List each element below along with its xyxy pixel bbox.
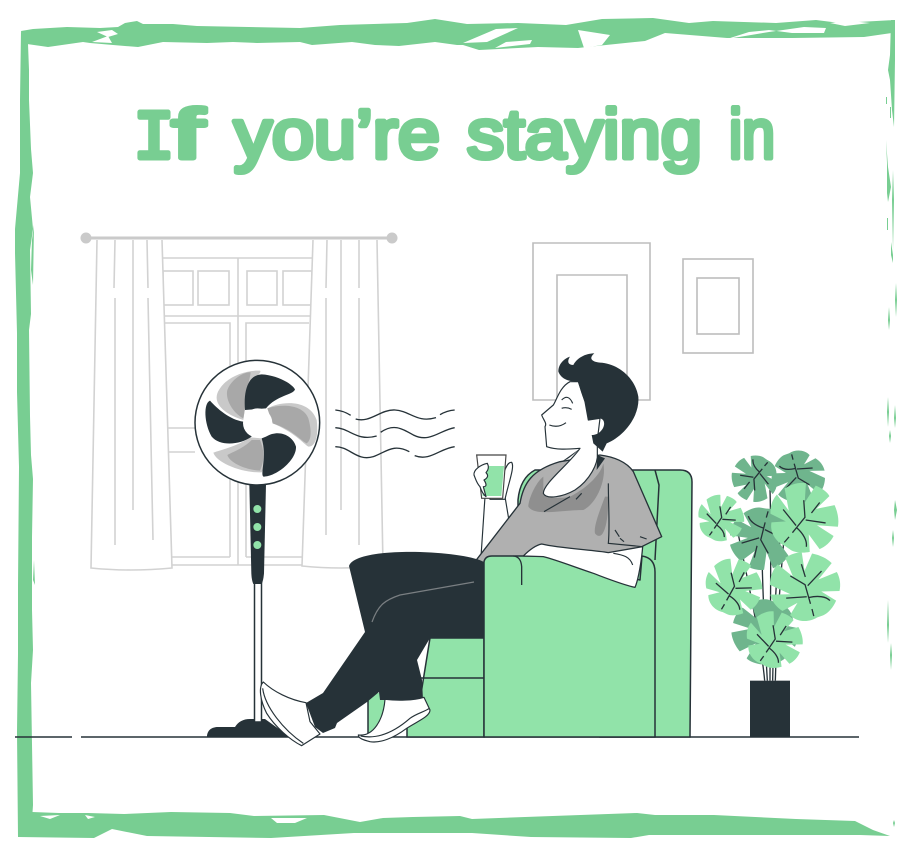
left curtain xyxy=(91,240,172,570)
standing fan xyxy=(195,360,455,737)
sweat stains xyxy=(528,463,608,536)
plant pot xyxy=(750,681,790,737)
trousers xyxy=(306,552,484,733)
left edge xyxy=(15,31,33,837)
fingers xyxy=(474,463,488,497)
fan head xyxy=(195,360,320,485)
dark leaves xyxy=(722,443,833,674)
sleeve cuff xyxy=(613,553,633,565)
fan base xyxy=(207,719,290,737)
air waves xyxy=(335,410,455,458)
neck and face xyxy=(542,382,600,497)
armchair back and seat xyxy=(368,470,692,737)
wall pictures xyxy=(533,243,753,400)
title: staying xyxy=(467,95,702,173)
light leaves xyxy=(689,469,852,678)
facial features xyxy=(549,397,573,426)
fan pole xyxy=(254,578,262,722)
neck shadow xyxy=(562,449,605,470)
floor line xyxy=(15,736,859,738)
shirt xyxy=(475,455,662,580)
title: f xyxy=(172,95,205,173)
bottom edge xyxy=(18,790,890,838)
fan buttons xyxy=(253,505,261,549)
plant stems xyxy=(737,490,787,681)
title: I xyxy=(133,101,175,180)
plant xyxy=(689,443,852,737)
chair arm curve xyxy=(513,556,522,585)
title: you’re xyxy=(234,95,440,173)
chair arm front xyxy=(484,556,655,737)
window with curtains xyxy=(91,240,383,570)
person xyxy=(260,353,662,746)
raised arm xyxy=(481,497,509,562)
shoes xyxy=(260,682,430,746)
right curtain xyxy=(302,240,383,568)
window frame xyxy=(163,258,313,565)
curtain rod xyxy=(80,232,398,244)
title xyxy=(133,95,775,180)
glass of water xyxy=(477,455,506,498)
hair xyxy=(558,353,638,452)
title: in xyxy=(729,95,775,173)
right edge fragments xyxy=(886,20,897,827)
thumb xyxy=(490,462,513,499)
top edge xyxy=(21,18,895,50)
resting arm xyxy=(523,544,643,587)
fan stem xyxy=(249,484,266,584)
